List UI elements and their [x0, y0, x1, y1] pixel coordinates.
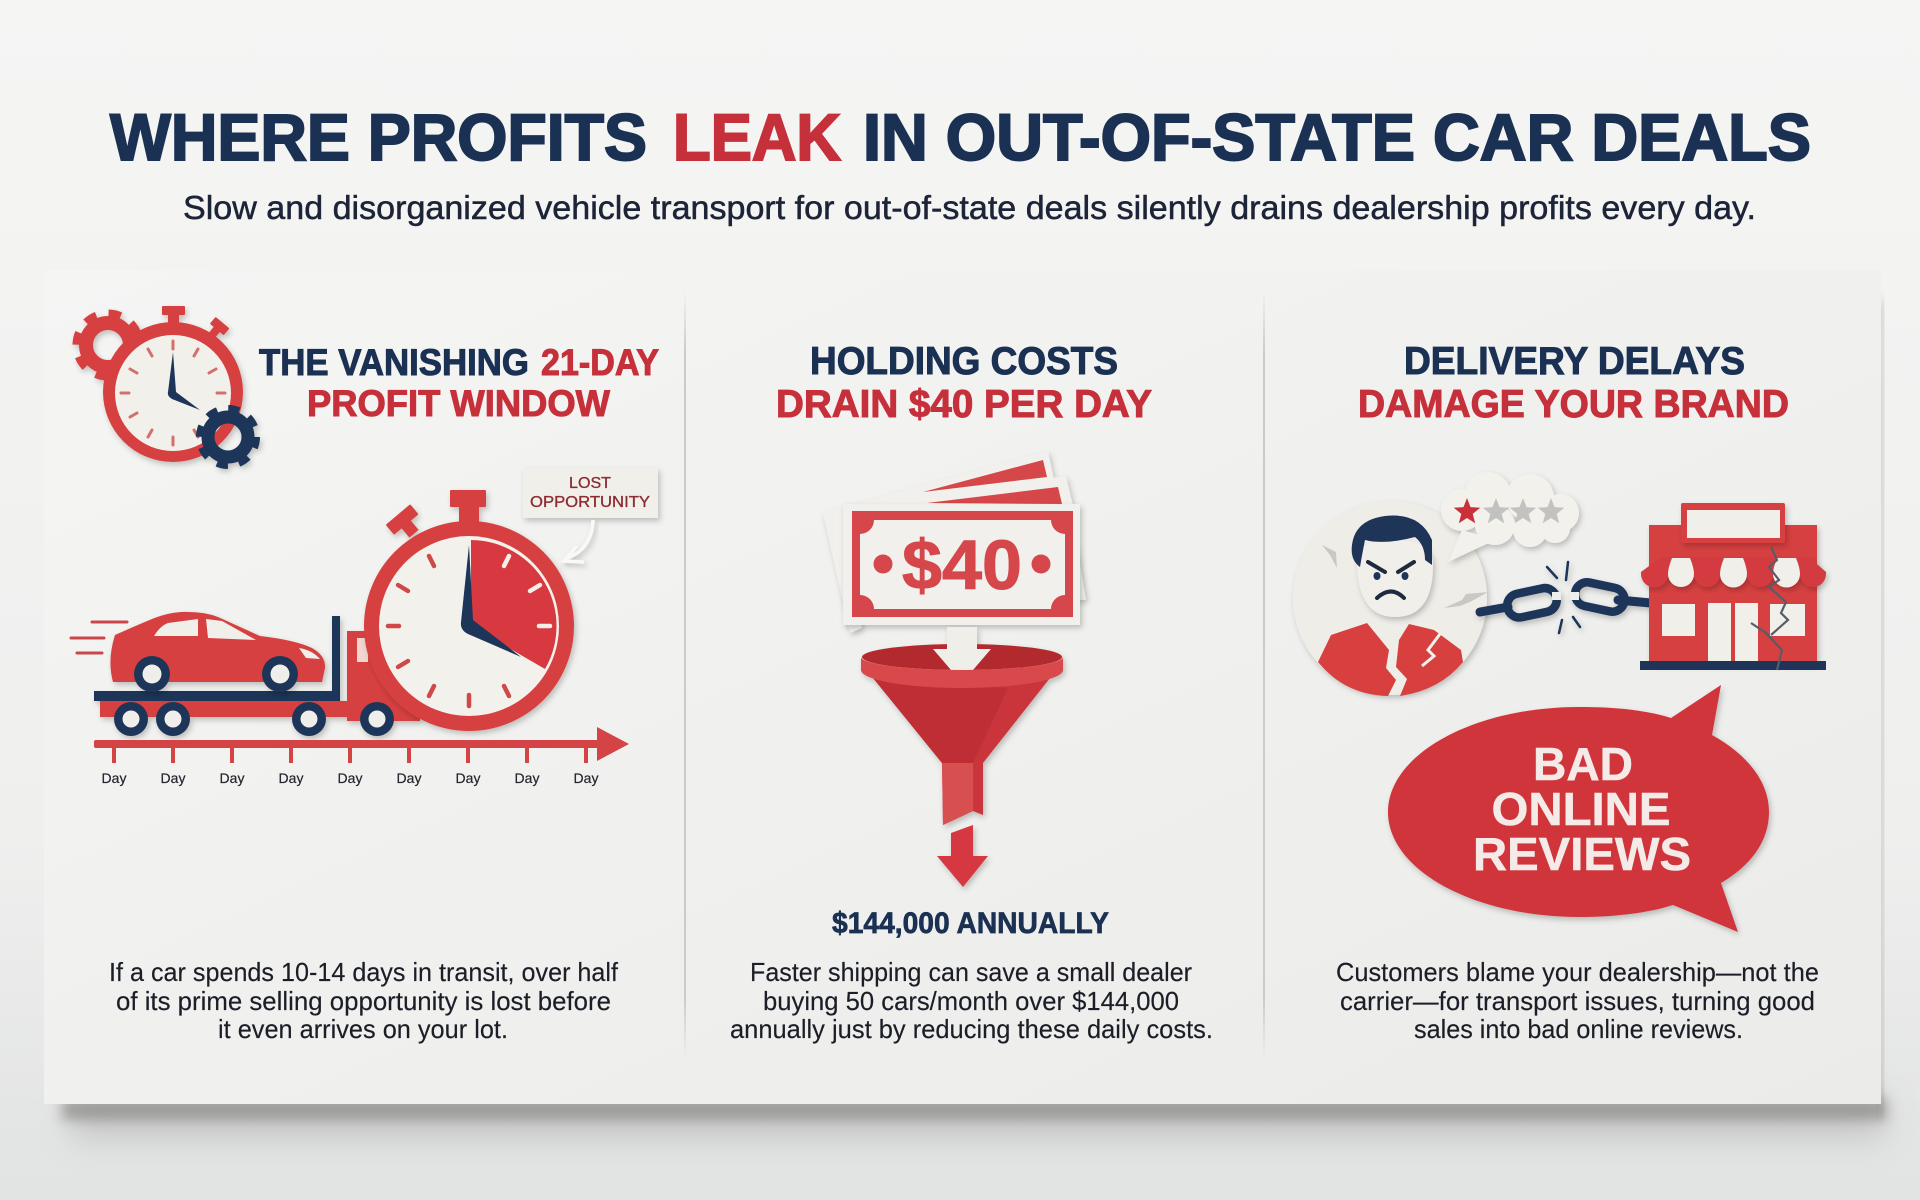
icon: broken chain: [1480, 562, 1651, 633]
panel: vanishing 21-day profit window: [71, 306, 659, 1044]
icon: speed lines: [71, 622, 127, 653]
timeline: Day: [456, 770, 480, 786]
heading: holding costs: HOLDING COSTS: [810, 340, 1118, 383]
timeline: Day: [279, 770, 303, 786]
panel sheet: [44, 270, 1881, 1104]
timeline: Day: [102, 770, 126, 786]
icon: cracked storefront: [1640, 503, 1826, 670]
speech bubble: bad online reviews: REVIEWS: [1473, 828, 1691, 880]
icon: truck: [94, 616, 420, 736]
callout: lost opportunity: LOST: [569, 475, 611, 492]
body text: savings: annually just by reducing these daily costs.: [730, 1014, 1213, 1044]
timeline: Day: [397, 770, 421, 786]
speech bubble: bad online reviews: BAD: [1533, 738, 1633, 790]
icon: stack of bills: [823, 451, 1086, 633]
heading: holding costs: DRAIN $40 PER DAY: [776, 383, 1152, 426]
body text: customers blame: carrier—for transport issues, turning good: [1340, 986, 1815, 1016]
body text: transit time: of its prime selling opportunity is lost before: [116, 986, 611, 1016]
icon: small stopwatch with gears: [77, 306, 256, 465]
icon: stack of bills: $40: [902, 526, 1022, 604]
timeline: Day: [515, 770, 539, 786]
heading: delivery delays: DELIVERY DELAYS: [1404, 340, 1745, 383]
timeline: Day: [220, 770, 244, 786]
icon: one star review cloud: [1441, 472, 1579, 562]
title: WHERE PROFITS: [110, 100, 647, 174]
heading: holding costs: [776, 340, 1152, 426]
icon: car: [110, 612, 325, 692]
body text: transit time: it even arrives on your lot.: [218, 1014, 508, 1044]
speech bubble: bad online reviews: ONLINE: [1492, 783, 1670, 835]
timeline: [94, 727, 629, 786]
heading: vanishing window: [259, 342, 659, 424]
callout: lost opportunity: [523, 468, 658, 518]
speech bubble: bad online reviews: [1388, 685, 1769, 932]
panel: holding costs: [730, 340, 1213, 1044]
icon: angry customer: [1293, 501, 1488, 696]
body text: savings: buying 50 cars/month over $144,000: [763, 986, 1179, 1016]
title: LEAK: [673, 100, 841, 174]
title: IN OUT-OF-STATE CAR DEALS: [863, 100, 1811, 174]
title: [110, 100, 1811, 174]
body text: customers blame: sales into bad online reviews.: [1414, 1014, 1743, 1044]
sheet shadow: [62, 300, 1886, 1139]
arrow: money draining: [937, 825, 988, 887]
body text: savings: Faster shipping can save a small dealer: [750, 957, 1192, 987]
annual figure: $144,000 ANNUALLY: [832, 907, 1109, 940]
body text: savings: [730, 957, 1213, 1044]
heading: vanishing window: THE VANISHING: [259, 342, 529, 383]
heading: delivery delays: DAMAGE YOUR BRAND: [1358, 383, 1789, 426]
body text: customers blame: Customers blame your dealership—not the: [1336, 957, 1819, 987]
subtitle: Slow and disorganized vehicle transport for out-of-state deals silently drains dealership profits every day.: [183, 189, 1756, 226]
panel: delivery delays: [1293, 340, 1826, 1044]
body text: transit time: [109, 957, 619, 1044]
callout: lost opportunity: OPPORTUNITY: [530, 494, 650, 511]
timeline: Day: [574, 770, 598, 786]
arrow: lost opportunity pointer: [564, 520, 593, 562]
icon: large stopwatch: [364, 490, 574, 731]
truck carrying car: [71, 612, 420, 736]
body text: transit time: If a car spends 10-14 days in transit, over half: [109, 957, 619, 987]
heading: vanishing window: PROFIT WINDOW: [307, 383, 610, 424]
icon: funnel: [861, 627, 1063, 825]
timeline: Day: [338, 770, 362, 786]
heading: vanishing window: 21-DAY: [541, 342, 659, 383]
heading: delivery delays: [1358, 340, 1789, 426]
timeline: Day: [161, 770, 185, 786]
body text: customers blame: [1336, 957, 1819, 1044]
